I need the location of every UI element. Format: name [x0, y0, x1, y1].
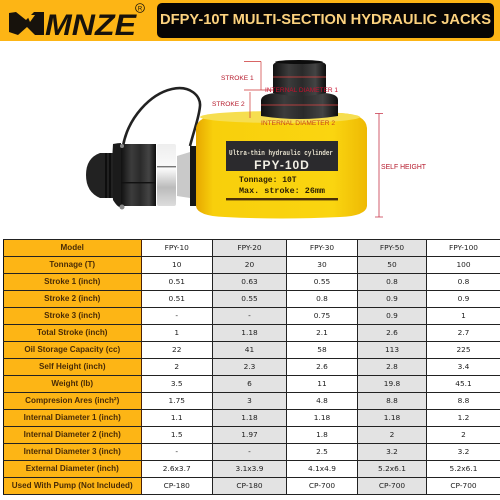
jack product image with dimension labels: [86, 60, 427, 218]
specification table: 3.1x3.9: [236, 464, 263, 473]
specification table: Internal Diameter 1 (inch): [24, 413, 121, 422]
logo: MNZE: MNZE: [45, 9, 137, 42]
label plate: Tonnage: 10T: [239, 176, 297, 185]
specification table: 1.8: [316, 430, 328, 439]
specification table: 2.1: [316, 328, 328, 337]
specification table: 1.18: [241, 413, 258, 422]
specification table: 1: [461, 311, 466, 320]
specification table: 19.8: [384, 379, 400, 388]
label plate: FPY-10D: [254, 158, 310, 172]
specification table: 0.9: [458, 294, 469, 303]
specification table: Used With Pump (Not Included): [12, 481, 133, 490]
specification table: 11: [317, 379, 327, 388]
specification table: FPY-10: [165, 243, 189, 252]
specification table: 2.3: [244, 362, 255, 371]
specification table: 6: [247, 379, 252, 388]
specification table: 225: [456, 345, 471, 354]
specification table: FPY-50: [380, 243, 404, 252]
specification table: 2.7: [458, 328, 469, 337]
specification table: 58: [317, 345, 327, 354]
specification table: 41: [245, 345, 254, 354]
specification table: 2: [461, 430, 466, 439]
specification table: 0.8: [386, 277, 398, 286]
specification table: 3.5: [171, 379, 183, 388]
label: internal diameter 2: INTERNAL DIAMETER 2: [261, 120, 335, 127]
specification table: Internal Diameter 3 (inch): [24, 447, 121, 456]
specification table: CP-700: [450, 481, 477, 490]
specification table: Internal Diameter 2 (inch): [24, 430, 121, 439]
specification table: 1.18: [241, 328, 258, 337]
specification table: Oil Storage Capacity (cc): [24, 345, 120, 354]
specification table: [3, 239, 500, 495]
specification table: 2: [174, 362, 179, 371]
logo: MNZE: [9, 3, 145, 42]
specification table: 4.1x4.9: [308, 464, 336, 473]
specification table: 3: [247, 396, 252, 405]
specification table: 5.2x6.1: [378, 464, 406, 473]
specification table: Stroke 3 (inch): [44, 311, 100, 320]
specification table: 0.8: [458, 277, 469, 286]
ram stage 2: [261, 93, 338, 119]
specification table: 1.18: [314, 413, 330, 422]
label plate: Ultra-thin hydraulic cylinder: [229, 150, 333, 158]
specification table: 113: [385, 345, 399, 354]
specification table: -: [248, 311, 251, 320]
specification table: 10: [172, 260, 181, 269]
specification table: 1.2: [458, 413, 469, 422]
specification table: Model: [61, 243, 84, 252]
specification table: 20: [245, 260, 254, 269]
specification table: Compresion Ares (inch²): [25, 396, 119, 405]
specification table: 5.2x6.1: [450, 464, 477, 473]
specification table: FPY-20: [237, 243, 262, 252]
specification table: 0.55: [314, 277, 330, 286]
specification table: 1.1: [171, 413, 183, 422]
specification table: 30: [317, 260, 327, 269]
specification table: 4.8: [316, 396, 328, 405]
specification table: 0.51: [169, 277, 185, 286]
dust cap strap: [123, 88, 200, 146]
specification table: 22: [172, 345, 181, 354]
specification table: 3.2: [386, 447, 398, 456]
specification table: 100: [456, 260, 471, 269]
specification table: -: [248, 447, 251, 456]
specification table: 45.1: [455, 379, 472, 388]
specification table: Tonnage (T): [49, 260, 95, 269]
specification table: -: [175, 447, 178, 456]
specification table: 1.5: [171, 430, 183, 439]
specification table: 50: [387, 260, 397, 269]
specification table: 8.8: [458, 396, 469, 405]
specification table: 0.55: [241, 294, 258, 303]
specification table: 2.6: [386, 328, 398, 337]
cylinder body: [196, 111, 367, 218]
specification table: 1.18: [384, 413, 400, 422]
specification table: CP-180: [164, 481, 190, 490]
specification table: 2.6x3.7: [163, 464, 191, 473]
specification table: 0.9: [386, 311, 398, 320]
specification table: 2: [390, 430, 394, 439]
header band: [0, 0, 500, 41]
dimension: stroke 1: STROKE 1: [221, 75, 254, 82]
specification table: Weight (lb): [51, 379, 93, 388]
title banner: DFPY-10T MULTI-SECTION HYDRAULIC JACKS: [160, 12, 491, 28]
hydraulic coupler: [86, 143, 196, 210]
specification table: FPY-30: [310, 243, 334, 252]
specification table: 1.97: [241, 430, 258, 439]
specification table: Total Stroke (inch): [37, 328, 107, 337]
specification table: 2.8: [386, 362, 398, 371]
specification table: Stroke 2 (inch): [44, 294, 100, 303]
specification table: Self Height (inch): [39, 362, 106, 371]
dimension: stroke 1: [221, 62, 338, 105]
specification table: 1.75: [169, 396, 185, 405]
dimension: self height: [375, 114, 427, 217]
dimension: stroke 2: [212, 92, 250, 118]
title banner: [157, 3, 494, 38]
specification table: 0.9: [386, 294, 398, 303]
specification table: CP-700: [309, 481, 335, 490]
specification table: -: [175, 311, 178, 320]
specification table: 3.4: [458, 362, 469, 371]
dimension: self height: SELF HEIGHT: [381, 164, 427, 171]
specification table: External Diameter (inch): [26, 464, 119, 473]
specification table: 0.8: [316, 294, 328, 303]
specification table: 0.63: [241, 277, 258, 286]
specification table: 1: [174, 328, 179, 337]
label plate: Max. stroke: 26mm: [239, 187, 325, 196]
specification table: 0.51: [169, 294, 185, 303]
label plate: [226, 141, 338, 200]
specification table: FPY-100: [449, 243, 478, 252]
specification table: Stroke 1 (inch): [44, 277, 100, 286]
logo: MNZE: R: [138, 6, 143, 12]
specification table: 3.2: [458, 447, 469, 456]
ram stage 1: [273, 61, 326, 96]
specification table: CP-700: [379, 481, 405, 490]
specification table: 2.5: [316, 447, 328, 456]
specification table: 8.8: [386, 396, 398, 405]
specification table: 2.6: [316, 362, 328, 371]
label: internal diameter 1: INTERNAL DIAMETER 1: [265, 87, 338, 94]
specification table: 0.75: [314, 311, 330, 320]
specification table: CP-180: [236, 481, 263, 490]
dimension: stroke 2: STROKE 2: [212, 101, 245, 108]
